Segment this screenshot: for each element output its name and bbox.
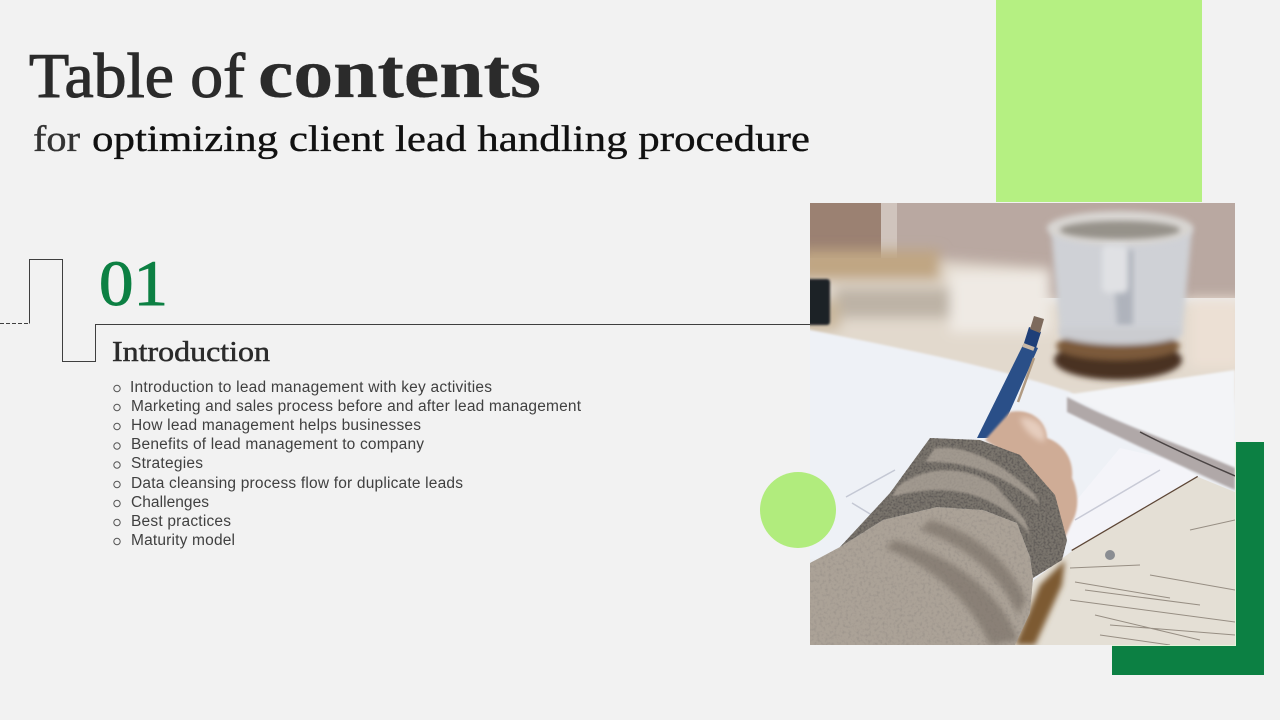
- section connector line: [0, 260, 810, 362]
- sweater sleeve: [810, 507, 1033, 645]
- dark object at table edge: [806, 279, 830, 325]
- sweater cuff: [840, 438, 1067, 578]
- title: [29, 36, 541, 113]
- section topics list: Benefits of lead management to company: [131, 436, 424, 453]
- hand: [985, 411, 1077, 540]
- section topics list: Best practices: [131, 513, 231, 530]
- wood table, lower right: [1012, 477, 1235, 645]
- coaster: [1054, 328, 1182, 380]
- blurred table top: [800, 250, 1250, 400]
- wall behind table: [810, 203, 1235, 298]
- section heading: Introduction: [112, 336, 271, 368]
- cuff light ribs: [892, 448, 1040, 535]
- dark green corner bracket: [1112, 442, 1264, 675]
- title: Table of: [29, 41, 245, 111]
- section topics list: Marketing and sales process before and after lead management: [131, 398, 582, 415]
- subtitle: optimizing client lead handling procedure: [92, 119, 810, 160]
- paper sheets: [805, 329, 1200, 560]
- notebook: [1066, 370, 1235, 490]
- decorative light green square: [996, 0, 1202, 202]
- decorative light green circle: [760, 472, 836, 548]
- section number: 01: [99, 248, 168, 320]
- pen: [977, 316, 1044, 438]
- section topics list: Maturity model: [131, 532, 235, 549]
- photo edge highlight: [1112, 442, 1236, 646]
- section topics list: Data cleansing process flow for duplicate leads: [131, 475, 463, 492]
- section topics list: How lead management helps businesses: [131, 417, 421, 434]
- subtitle: for: [33, 119, 80, 160]
- sleeve shading folds: [885, 520, 1026, 645]
- section topics list: Introduction to lead management with key activities: [130, 379, 492, 396]
- section topics list: [114, 379, 582, 549]
- photo: hand writing with pen beside a coffee mug: [800, 203, 1250, 645]
- coffee mug: [1047, 211, 1193, 344]
- section topics list: Strategies: [131, 455, 203, 472]
- section topics list: Challenges: [131, 494, 209, 511]
- title: contents: [258, 36, 541, 113]
